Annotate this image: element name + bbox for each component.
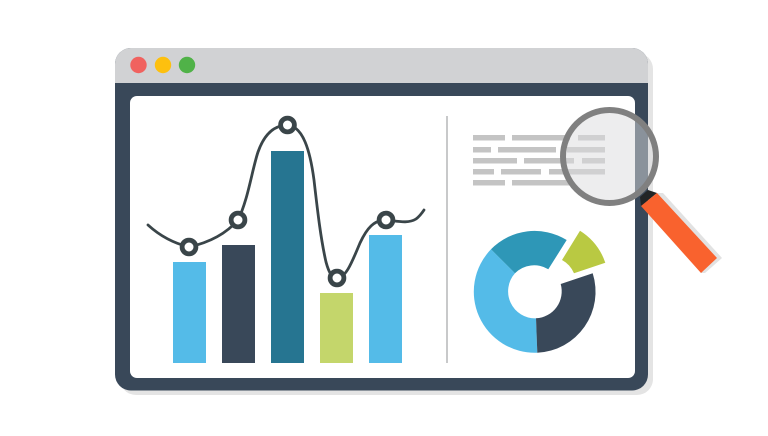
window frame bbox=[115, 48, 648, 390]
magnifying glass bbox=[563, 110, 722, 273]
donut segment: dark navy bbox=[536, 273, 596, 353]
window shadow bbox=[120, 53, 653, 395]
window button: yellow bbox=[155, 57, 171, 73]
data point 1 bbox=[182, 240, 196, 254]
bar chart bbox=[173, 151, 402, 363]
data point 5 bbox=[379, 213, 393, 227]
bar 1 bbox=[173, 262, 206, 363]
donut segment: light blue bbox=[474, 249, 537, 353]
title bar bbox=[115, 48, 648, 83]
data point 3 bbox=[281, 118, 294, 132]
bar 4 bbox=[320, 293, 353, 363]
handle collar bbox=[640, 190, 657, 206]
donut segment: teal bbox=[491, 231, 567, 273]
donut segment: lime, pulled out bbox=[562, 231, 605, 273]
window button: green bbox=[179, 57, 195, 73]
bar 2 bbox=[222, 245, 255, 363]
data point 4 bbox=[330, 271, 344, 285]
browser window bbox=[115, 48, 648, 390]
bar 5 bbox=[369, 235, 402, 363]
handle shadow bbox=[657, 193, 722, 273]
handle bbox=[641, 193, 717, 273]
placeholder text lines bbox=[473, 135, 605, 186]
window button: red bbox=[130, 57, 147, 73]
trend curve bbox=[148, 125, 424, 278]
content panel bbox=[130, 96, 635, 378]
panel divider bbox=[446, 116, 448, 363]
line chart bbox=[148, 118, 424, 285]
data point 2 bbox=[231, 213, 245, 227]
donut chart bbox=[474, 231, 605, 353]
lens bbox=[563, 110, 656, 203]
bar 3 bbox=[271, 151, 304, 363]
